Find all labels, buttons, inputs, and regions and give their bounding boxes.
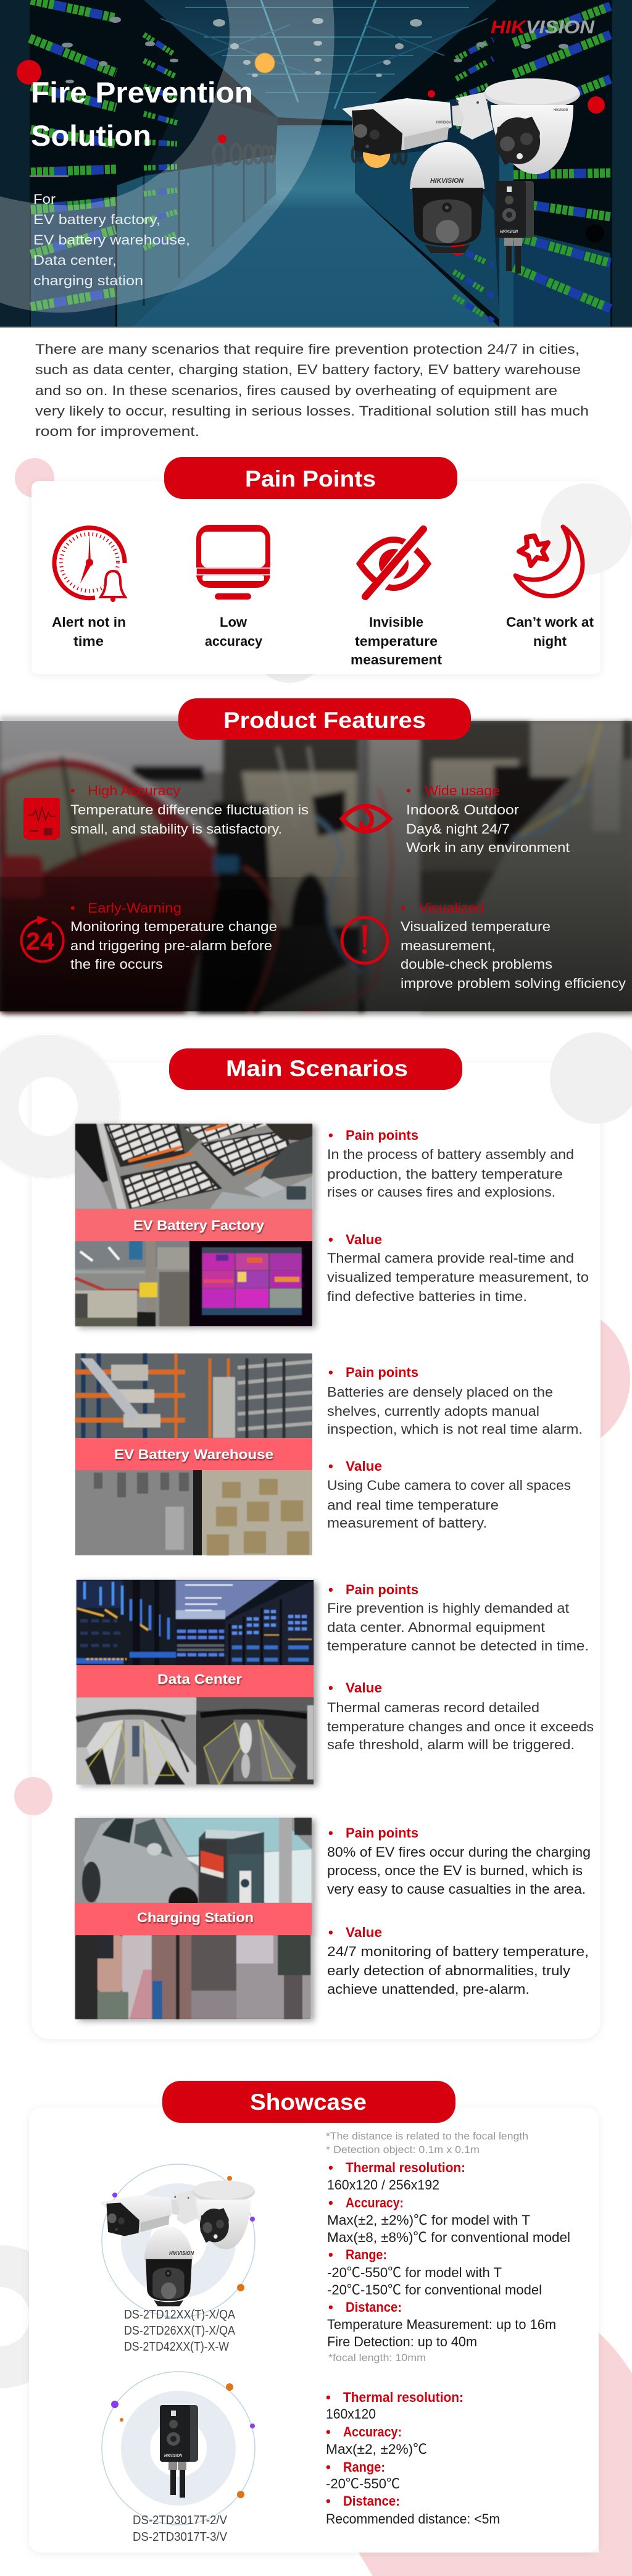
text: thermal camera specs: Fire Detection: up to 40m [327, 2334, 477, 2349]
text: thermal camera specs: • [328, 2195, 333, 2210]
feature: visualized [342, 900, 626, 991]
photo: battery factory [75, 1124, 312, 1326]
text: thermal camera specs: Max(±2, ±2%)℃ for model with T [327, 2212, 530, 2228]
heading: showcase [162, 2081, 455, 2123]
hero: scope list: EV battery factory, [33, 212, 160, 227]
feature: early warning: and triggering pre-alarm before [70, 938, 272, 953]
scenario: charging station: Charging Station [137, 1910, 254, 1925]
text: cube camera models: DS-2TD3017T-3/V [133, 2530, 228, 2544]
photo: EV charging background [0, 716, 632, 1013]
text: factory pain points and value: Pain points [346, 1127, 418, 1143]
panel: product features [0, 698, 632, 1014]
hero: logo: HIKVISION [491, 17, 595, 38]
text: factory pain points and value: • [328, 1127, 333, 1143]
text: can't work at night: Can’t work at [506, 614, 594, 630]
scenario: EV battery factory [75, 1124, 589, 1326]
intro paragraph: room for improvement. [35, 424, 199, 439]
product: thermal camera trio: HIKVISION [169, 2251, 194, 2256]
icon: 24 hours [22, 916, 64, 961]
text: data center pain points and value: • [328, 1582, 333, 1597]
text: data center pain points and value: data center. Abnormal equipment [327, 1620, 545, 1635]
heading: pain points: Pain Points [245, 466, 376, 491]
feature: wide usage: • [406, 783, 411, 798]
text: warehouse pain points and value [327, 1365, 583, 1531]
intro paragraph: and so on. In these scenarios, fires caused by overheating of equipment are [35, 383, 557, 398]
text: low accuracy: accuracy [205, 634, 263, 649]
text: thermal camera specs: Range: [346, 2247, 387, 2262]
text: thermal camera specs: Thermal resolution: [346, 2160, 465, 2175]
text: thermal camera specs: * Detection object: 0.1m x 0.1m [326, 2144, 480, 2156]
text: warehouse pain points and value: Pain points [346, 1365, 418, 1380]
text: thermal camera specs: 160x120 / 256x192 [327, 2177, 439, 2193]
feature: high accuracy: Temperature difference fluctuation is [70, 802, 309, 818]
text: cube camera specs: Thermal resolution: [343, 2390, 464, 2405]
text: thermal camera models: DS-2TD42XX(T)-X-W [124, 2340, 229, 2354]
scenario: charging station [75, 1818, 591, 2019]
text: factory pain points and value: • [328, 1232, 333, 1247]
text: data center pain points and value: Fire prevention is highly demanded at [327, 1600, 569, 1616]
text: cube camera specs: Max(±2, ±2%)℃ [326, 2441, 427, 2457]
text: warehouse pain points and value: and real time temperature [327, 1497, 499, 1513]
text: cube camera specs: Recommended distance: <5m [326, 2511, 500, 2527]
hero: camera products [342, 78, 580, 274]
photo: data center [77, 1580, 314, 1784]
text: data center pain points and value: temperature changes and once it exceeds [327, 1719, 594, 1734]
scenario: data center: Data Center [157, 1671, 242, 1687]
scenario: EV battery warehouse [75, 1353, 583, 1555]
text: charging pain points and value: 80% of EV fires occur during the charging [327, 1844, 591, 1860]
text: invisible temperature measurement: temperature [355, 634, 438, 649]
text: factory pain points and value: visualized temperature measurement, to [327, 1269, 589, 1285]
feature: high accuracy: • [70, 783, 75, 798]
text: alert not in time: time [73, 634, 104, 649]
text: warehouse pain points and value: Using Cube camera to cover all spaces [327, 1478, 571, 1493]
hero: camera products: HIKVISION [430, 177, 464, 185]
heading: main scenarios [169, 1048, 462, 1090]
text: cube camera specs [326, 2390, 500, 2527]
icon: moon and star [515, 527, 583, 596]
icon: crossed eye [360, 524, 428, 605]
hero: camera products: HIKVISION [500, 230, 518, 234]
hero: rack rows [30, 0, 610, 327]
text: charging pain points and value: 24/7 monitoring of battery temperature, [327, 1944, 589, 1959]
text: warehouse pain points and value: shelves, currently adopts manual [327, 1403, 539, 1419]
text: cube camera specs: -20℃-550℃ [326, 2476, 400, 2491]
text: data center pain points and value: Pain points [346, 1582, 418, 1597]
scenario: EV battery factory: EV Battery Factory [133, 1218, 265, 1233]
text: data center pain points and value: Value [346, 1680, 382, 1696]
heading: pain points [164, 457, 457, 499]
text: cube camera specs: • [326, 2390, 331, 2405]
hero: scope list: For [33, 191, 56, 207]
hero: scope list: Data center, [33, 253, 117, 268]
hero: translucent crescent [0, 0, 335, 312]
text: can't work at night [506, 614, 594, 649]
text: invisible temperature measurement: measurement [351, 652, 443, 667]
feature: early warning: • [70, 900, 75, 916]
heading: showcase: Showcase [250, 2089, 367, 2115]
panel: main scenarios [0, 1032, 632, 2039]
feature: visualized: improve problem solving efficiency [401, 976, 626, 991]
intro paragraph: such as data center, charging station, EV battery factory, EV battery warehouse [35, 362, 581, 377]
text: cube camera specs: • [326, 2424, 331, 2440]
text: charging pain points and value [327, 1825, 591, 1997]
hero: scope list [33, 191, 190, 288]
hero: scope list: charging station [33, 273, 143, 288]
text: charging pain points and value: • [328, 1925, 333, 1940]
hero: title: Fire Prevention [31, 76, 253, 109]
feature: wide usage [342, 783, 570, 855]
text: thermal camera models [124, 2308, 236, 2354]
text: charging pain points and value: Pain points [346, 1825, 418, 1841]
panel: showcase [0, 2081, 632, 2576]
text: data center pain points and value: temperature cannot be detected in time. [327, 1638, 589, 1654]
text: cube camera specs: • [326, 2493, 331, 2509]
hero banner [0, 0, 632, 327]
text: thermal camera specs: Accuracy: [346, 2195, 404, 2210]
text: cube camera specs: Accuracy: [343, 2424, 402, 2440]
hero: title [31, 76, 253, 152]
photo: battery warehouse [75, 1353, 312, 1555]
feature: wide usage: Wide usage [425, 783, 500, 798]
text: thermal camera models: DS-2TD12XX(T)-X/QA [124, 2308, 236, 2322]
heading: product features [178, 698, 471, 740]
feature: high accuracy: High Accuracy [88, 783, 180, 798]
text: thermal camera specs: Max(±8, ±8%)℃ for conventional model [327, 2230, 570, 2245]
feature: early warning: the fire occurs [70, 956, 163, 972]
text: thermal camera specs: • [328, 2247, 333, 2262]
text: thermal camera specs: Distance: [346, 2299, 402, 2315]
text: charging pain points and value: • [328, 1825, 333, 1841]
text: factory pain points and value [327, 1127, 589, 1304]
hero: camera products: HIKVISION [554, 109, 568, 112]
text: warehouse pain points and value: measurement of battery. [327, 1515, 487, 1531]
feature: wide usage: Indoor& Outdoor [406, 802, 519, 818]
text: invisible temperature measurement [351, 614, 443, 667]
text: factory pain points and value: Thermal camera provide real-time and [327, 1250, 574, 1266]
text: charging pain points and value: early detection of abnormalities, truly [327, 1963, 570, 1978]
feature: high accuracy [23, 783, 309, 840]
text: cube camera specs: Distance: [343, 2493, 400, 2509]
heading: product features: Product Features [223, 708, 426, 733]
feature: visualized: • [401, 900, 405, 916]
text: charging pain points and value: very easy to cause casualties in the area. [327, 1881, 586, 1897]
scenario: EV battery warehouse: EV Battery Warehouse [114, 1447, 273, 1462]
text: data center pain points and value: • [328, 1680, 333, 1696]
text: cube camera specs: 160x120 [326, 2406, 376, 2422]
text: charging pain points and value: Value [346, 1925, 382, 1940]
product: cube camera: HIKVISION [164, 2454, 183, 2458]
feature: visualized: measurement, [401, 938, 496, 953]
feature: wide usage: Day& night 24/7 [406, 821, 510, 837]
text: warehouse pain points and value: Value [346, 1458, 382, 1474]
feature: early warning: Early-Warning [88, 900, 181, 916]
intro paragraph: There are many scenarios that require fire prevention protection 24/7 in cities, [35, 341, 580, 357]
text: thermal camera specs: • [328, 2299, 333, 2315]
text: data center pain points and value [327, 1582, 594, 1752]
icon: clock with bell [54, 528, 125, 602]
text: data center pain points and value: Thermal cameras record detailed [327, 1700, 539, 1715]
text: warehouse pain points and value: • [328, 1458, 333, 1474]
text: low accuracy: Low [220, 614, 247, 630]
feature: early warning: Monitoring temperature change [70, 919, 277, 934]
hero: title: Solution [31, 119, 151, 152]
icon: 24 hours: 24 [26, 928, 55, 955]
text: low accuracy [205, 614, 263, 649]
icon: exclamation [342, 918, 388, 963]
text: charging pain points and value: achieve unattended, pre-alarm. [327, 1981, 530, 1997]
feature: visualized: Visualized [419, 900, 484, 916]
intro paragraph [35, 341, 589, 439]
text: factory pain points and value: In the process of battery assembly and [327, 1147, 574, 1162]
panel: pain points [15, 457, 632, 683]
text: cube camera specs: Range: [343, 2459, 385, 2475]
icon: monitor [196, 525, 270, 600]
icon: eye [342, 806, 390, 831]
text: thermal camera specs: *focal length: 10mm [328, 2352, 426, 2364]
text: data center pain points and value: safe threshold, alarm will be triggered. [327, 1737, 575, 1752]
text: warehouse pain points and value: Batteries are densely placed on the [327, 1384, 553, 1400]
text: thermal camera specs: *The distance is related to the focal length [326, 2130, 528, 2142]
scenario: data center [77, 1580, 594, 1784]
hero: ceiling [144, 0, 497, 121]
hero: decorative dots [17, 53, 605, 256]
text: thermal camera specs: Temperature Measurement: up to 16m [327, 2317, 556, 2332]
text: charging pain points and value: process, once the EV is burned, which is [327, 1863, 583, 1878]
photo: charging station [75, 1818, 312, 2019]
text: thermal camera specs: -20℃-150℃ for conventional model [327, 2282, 542, 2298]
feature: early warning [22, 900, 277, 972]
text: factory pain points and value: find defective batteries in time. [327, 1289, 527, 1304]
hero: scope list: EV battery warehouse, [33, 232, 190, 248]
text: factory pain points and value: rises or causes fires and explosions. [327, 1184, 555, 1200]
feature: high accuracy: small, and stability is satisfactory. [70, 821, 282, 837]
icon: waveform device [23, 798, 60, 840]
text: cube camera models [133, 2514, 228, 2544]
text: warehouse pain points and value: • [328, 1365, 333, 1380]
text: cube camera models: DS-2TD3017T-2/V [133, 2514, 228, 2527]
text: thermal camera specs: -20℃-550℃ for model with T [327, 2265, 502, 2280]
feature: visualized: double-check problems [401, 956, 552, 972]
intro paragraph: very likely to occur, resulting in serious losses. Traditional solution still has much [35, 403, 589, 419]
text: factory pain points and value: production, the battery temperature [327, 1166, 563, 1182]
feature: wide usage: Work in any environment [406, 840, 570, 855]
text: alert not in time: Alert not in [52, 614, 126, 630]
text: thermal camera specs: • [328, 2160, 333, 2175]
text: cube camera specs: • [326, 2459, 331, 2475]
hero: floor [131, 125, 499, 327]
text: factory pain points and value: Value [346, 1232, 382, 1247]
text: thermal camera models: DS-2TD26XX(T)-X/QA [124, 2324, 236, 2338]
text: warehouse pain points and value: inspection, which is not real time alarm. [327, 1421, 583, 1437]
text: alert not in time [52, 614, 126, 649]
text: can't work at night: night [533, 634, 567, 649]
heading: main scenarios: Main Scenarios [226, 1056, 408, 1081]
product: cube camera [102, 2372, 255, 2525]
feature: visualized: Visualized temperature [401, 919, 551, 934]
text: thermal camera specs [326, 2130, 570, 2364]
product: thermal camera trio [100, 2164, 255, 2317]
hero: camera products: HIKVISION [436, 121, 451, 125]
text: invisible temperature measurement: Invisible [369, 614, 423, 630]
